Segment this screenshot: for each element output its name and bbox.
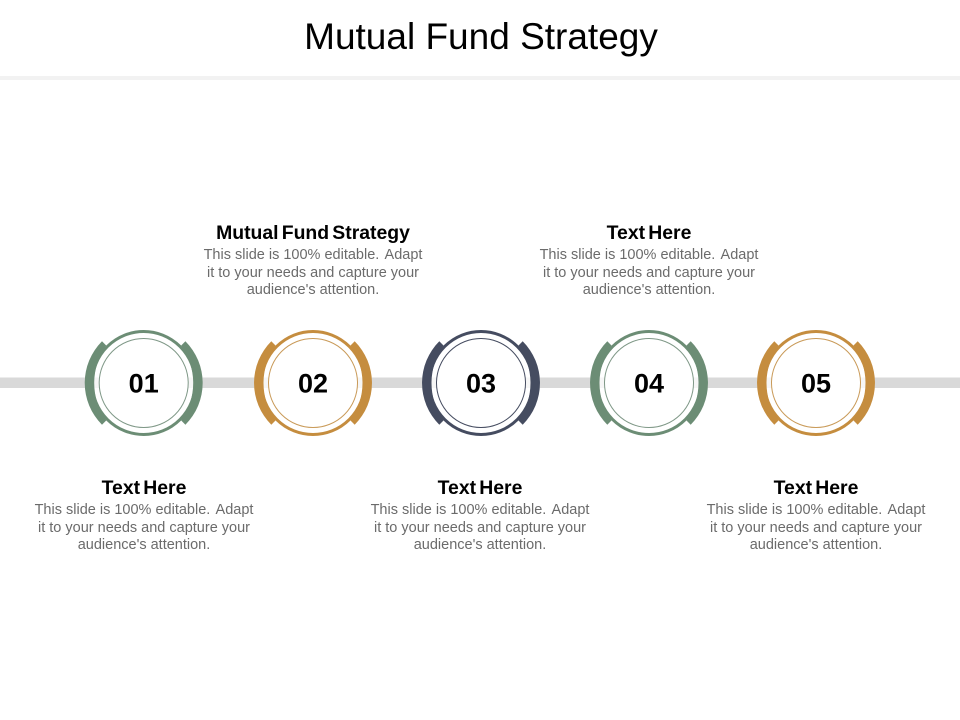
text block: step 03: it to your needs and capture your (374, 520, 586, 536)
step 02 marker (254, 332, 372, 434)
text block: step 03: This slide is 100% editable. Adapt (371, 502, 589, 518)
step 03 marker: 03 (466, 368, 496, 398)
text block: step 01: audience's attention. (78, 537, 210, 553)
text block: step 05: audience's attention. (750, 537, 882, 553)
step 01 marker (85, 332, 203, 434)
text block: step 05: it to your needs and capture your (710, 520, 922, 536)
text block: step 05 (706, 477, 926, 553)
step 05 marker: 05 (801, 368, 831, 398)
text block: step 02: audience's attention. (247, 282, 379, 298)
text block: step 04 (540, 222, 758, 298)
text block: step 04: audience's attention. (583, 282, 715, 298)
text block: step 03: Text Here (438, 477, 522, 499)
text block: step 01: This slide is 100% editable. Adapt (35, 502, 253, 518)
text block: step 02: it to your needs and capture your (207, 265, 419, 281)
step 04 marker: 04 (634, 368, 664, 398)
step 04 marker (590, 332, 708, 434)
step 02 marker: 02 (298, 368, 328, 398)
text block: step 05: This slide is 100% editable. Adapt (707, 502, 925, 518)
text block: step 02 (204, 222, 422, 298)
text block: step 02: This slide is 100% editable. Adapt (204, 247, 422, 263)
text block: step 01: it to your needs and capture your (38, 520, 250, 536)
title: Mutual Fund Strategy (304, 16, 658, 57)
text block: step 01 (34, 477, 254, 553)
text block: step 05: Text Here (774, 477, 858, 499)
text block: step 01: Text Here (102, 477, 186, 499)
text block: step 03 (370, 477, 590, 553)
step 01 marker: 01 (129, 368, 159, 398)
text block: step 04: This slide is 100% editable. Adapt (540, 247, 758, 263)
text block: step 02: Mutual Fund Strategy (216, 222, 410, 244)
text block: step 04: Text Here (607, 222, 691, 244)
text block: step 03: audience's attention. (414, 537, 546, 553)
text block: step 04: it to your needs and capture your (543, 265, 755, 281)
step 05 marker (757, 332, 875, 434)
step 03 marker (422, 332, 540, 434)
